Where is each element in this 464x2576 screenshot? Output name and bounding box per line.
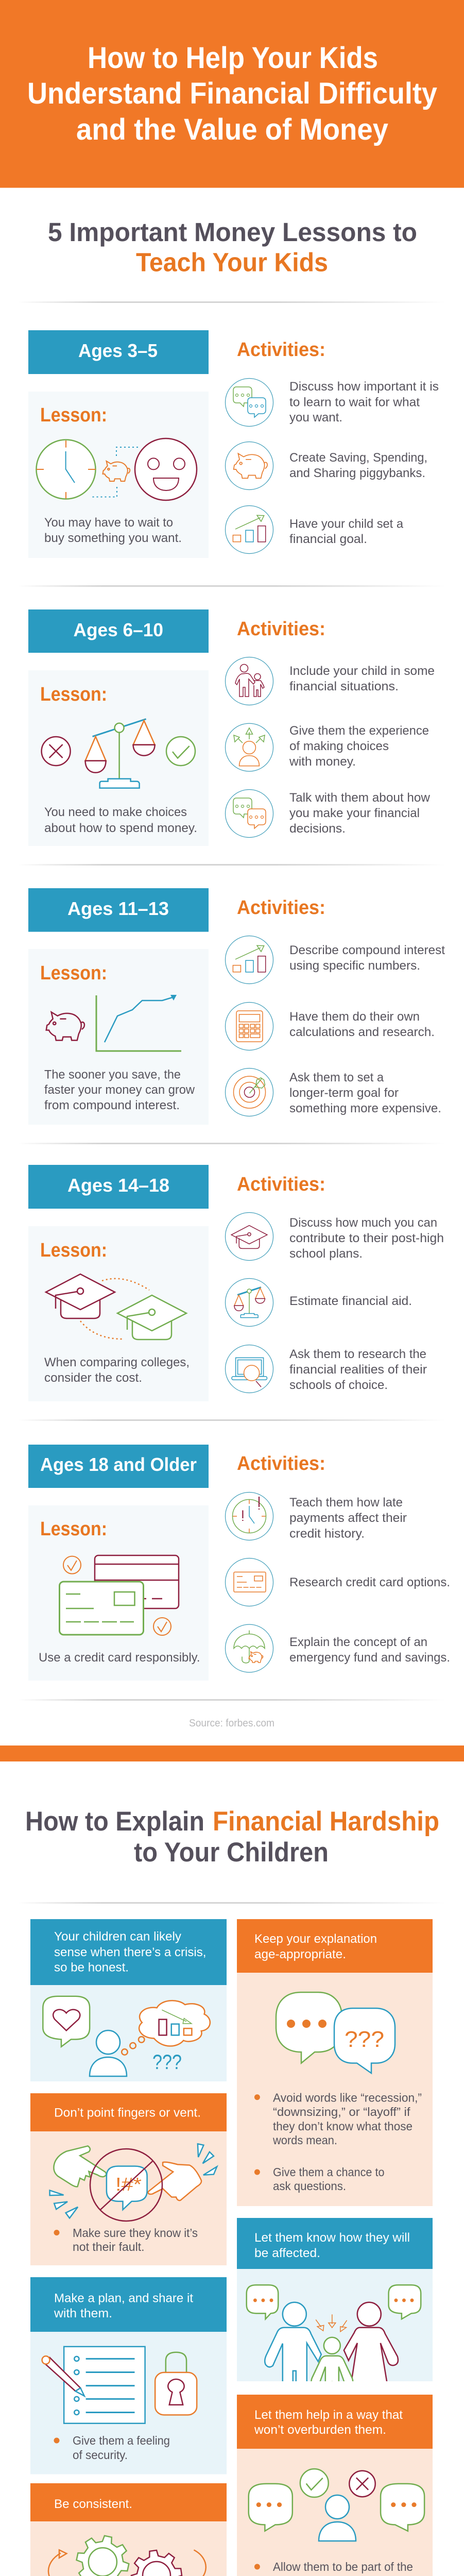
panel: be honest: Your children can likely: [54, 1930, 181, 1943]
bullet: Make sure they know it’s: [73, 2226, 198, 2240]
heading: 5 important money lessons: Teach Your Kids: [136, 247, 328, 277]
activity: piggybanks: [226, 442, 427, 489]
bullet: [54, 2226, 198, 2253]
activity: research schools: financial realities of their: [289, 1363, 427, 1377]
activity: include your child: Include your child in some: [289, 664, 435, 678]
main title: and the Value of Money: [76, 113, 388, 146]
section: ages 11-13: [28, 888, 445, 1125]
panel: let them help: won’t overburden them.: [254, 2423, 386, 2437]
icon: piggy bank and growth chart: [46, 995, 181, 1051]
source: forbes: Source: forbes.com: [189, 1718, 274, 1729]
icon: family with speech bubbles: [246, 2284, 421, 2381]
panel: age-appropriate: [237, 1919, 433, 2206]
lesson panel: Lesson:: [40, 962, 107, 984]
lesson panel: [28, 1226, 209, 1401]
activity: calculations: [226, 1003, 435, 1050]
icon: clock, piggy bank and smiley: [36, 438, 197, 500]
bullet: not their fault.: [73, 2240, 144, 2253]
lesson panel: Lesson:: [40, 1240, 107, 1261]
activity: talk about decisions: Talk with them about how: [289, 791, 431, 805]
activity: contribute to plans: [226, 1213, 444, 1261]
activity: credit card options: Research credit card options.: [289, 1575, 450, 1589]
activity: discuss waiting: to learn to wait for what: [289, 396, 420, 409]
activity: late payments: credit history.: [289, 1527, 365, 1540]
heading: financial hardship: to Your Children: [134, 1837, 329, 1868]
activity: calculations: calculations and research.: [289, 1025, 435, 1039]
lesson panel: [28, 670, 209, 846]
icon: gears and arrows: [48, 2531, 206, 2576]
panel: be consistent: Be consistent.: [54, 2497, 132, 2511]
lesson panel: [28, 392, 209, 558]
icon: graduation caps: [46, 1274, 186, 1340]
activities heading: Activities:: [237, 1453, 325, 1475]
header banner: [0, 0, 464, 188]
lesson panel: about how to spend money.: [44, 821, 197, 835]
activity: making choices: Give them the experience: [289, 724, 429, 738]
activity: research schools: schools of choice.: [289, 1378, 388, 1392]
activity: financial goal: [226, 506, 404, 553]
lesson panel: from compound interest.: [44, 1098, 180, 1112]
activities heading: Activities:: [237, 339, 325, 361]
icon: speech bubbles with question marks: [276, 1992, 395, 2073]
age banner: [28, 1445, 209, 1488]
panel: be honest: so be honest.: [54, 1961, 129, 1974]
panel: let them help: Let them help in a way that: [254, 2408, 403, 2422]
activity: talk about decisions: [226, 789, 431, 838]
activity: emergency fund: Explain the concept of an: [289, 1635, 427, 1649]
activity: late payments: Teach them how late: [289, 1496, 403, 1510]
panel: don't point fingers: [30, 2093, 227, 2265]
panel: let them help: [237, 2395, 433, 2576]
icon: checklist and padlock: [42, 2347, 197, 2424]
panel: make a plan: Make a plan, and share it: [54, 2292, 193, 2306]
heading: financial hardship: Financial Hardship: [213, 1806, 439, 1837]
panel: make a plan: with them.: [54, 2307, 112, 2320]
activity: contribute to plans: school plans.: [289, 1247, 363, 1261]
activity: late payments: [226, 1492, 407, 1540]
panel: be consistent: [30, 2483, 227, 2576]
orange separator bar: [0, 1745, 464, 1761]
bullet: of security.: [73, 2448, 128, 2462]
lesson panel: The sooner you save, the: [44, 1067, 181, 1082]
activity: making choices: [226, 723, 429, 771]
lesson panel: faster your money can grow: [44, 1083, 195, 1097]
lesson panel: Lesson:: [40, 1518, 107, 1540]
activity: emergency fund: emergency fund and savings.: [289, 1651, 450, 1665]
panel: be honest: sense when there’s a crisis,: [54, 1945, 206, 1959]
section: ages 6-10: [28, 609, 435, 846]
section: ages 14-18: [28, 1165, 444, 1401]
bullets: words mean.: [272, 2133, 337, 2147]
section: ages 18 and older: [28, 1445, 450, 1681]
activity: longer-term goal: Ask them to set a: [289, 1071, 384, 1084]
activities heading: Activities:: [237, 1174, 325, 1195]
activities heading: Activities:: [237, 897, 325, 919]
activity: talk about decisions: you make your financial: [289, 806, 420, 820]
icon: child sensing a crisis: ???: [152, 2051, 182, 2074]
bullets: they don’t know what those: [273, 2120, 413, 2133]
activity: emergency fund: [226, 1624, 450, 1672]
panel: be honest: [30, 1919, 227, 2081]
heading: financial hardship: [25, 1806, 439, 1868]
activity: contribute to plans: contribute to their post-high: [289, 1231, 444, 1245]
main title: [27, 41, 437, 146]
age banner: [28, 1165, 209, 1209]
activity: financial goal: financial goal.: [289, 532, 367, 546]
age banner: Ages 6–10: [73, 619, 163, 640]
activities heading: Activities:: [237, 618, 325, 640]
main title: Understand Financial Difficulty: [27, 77, 437, 110]
activity: discuss waiting: Discuss how important it is: [289, 380, 439, 394]
panel: don't point fingers: Don’t point fingers or vent.: [54, 2106, 201, 2120]
activity: calculations: Have them do their own: [289, 1010, 420, 1024]
age banner: Ages 14–18: [67, 1175, 169, 1196]
icon: balance scale with x and check: [42, 719, 195, 788]
main title: How to Help Your Kids: [88, 41, 378, 75]
icon: pointing hands with prohibition sign: !#*: [115, 2174, 142, 2195]
age banner: Ages 18 and Older: [40, 1454, 197, 1475]
section: ages 3-5: [28, 330, 439, 558]
panel: how they will be affected: [237, 2218, 433, 2381]
icon: speech bubbles with question marks: ???: [345, 2027, 384, 2052]
heading: financial hardship: How to Explain: [25, 1806, 204, 1837]
activity: discuss waiting: you want.: [289, 411, 342, 425]
panel: how they will be affected: be affected.: [254, 2246, 320, 2260]
lesson panel: Use a credit card responsibly.: [39, 1651, 200, 1665]
age banner: [28, 330, 209, 374]
bullet: Give them a feeling: [73, 2434, 170, 2447]
activity: research schools: [226, 1345, 427, 1393]
activity: financial goal: Have your child set a: [289, 517, 404, 531]
activity: discuss waiting: [226, 378, 439, 427]
bullets: Give them a chance to: [273, 2165, 384, 2179]
activity: research schools: Ask them to research the: [289, 1347, 426, 1361]
activity: longer-term goal: something more expensive.: [289, 1101, 441, 1115]
activity: making choices: of making choices: [289, 739, 389, 753]
activity: financial aid: Estimate financial aid.: [289, 1294, 412, 1308]
activity: compound interest: [226, 936, 445, 984]
icon: pointing hands with prohibition sign: [50, 2144, 217, 2221]
activity: include your child: financial situations.: [289, 680, 399, 693]
activity: contribute to plans: Discuss how much you can: [289, 1216, 437, 1230]
bullets: Allow them to be part of the: [273, 2560, 413, 2573]
lesson panel: Lesson:: [40, 684, 107, 705]
panel: how they will be affected: Let them know how they will: [254, 2231, 410, 2245]
lesson panel: [28, 949, 209, 1125]
panel: make a plan: [30, 2277, 227, 2474]
age banner: [28, 888, 209, 932]
activity: longer-term goal: longer-term goal for: [289, 1086, 399, 1100]
lesson panel: You need to make choices: [44, 805, 187, 819]
bullets: Avoid words like “recession,”: [273, 2091, 422, 2105]
icon: child sensing a crisis: [43, 1996, 210, 2076]
activity: making choices: with money.: [289, 755, 356, 769]
activity: compound interest: using specific numbers.: [289, 959, 420, 973]
bullet: [54, 2434, 170, 2462]
bullets: “downsizing,” or “layoff” if: [273, 2105, 410, 2119]
lesson panel: When comparing colleges,: [44, 1355, 190, 1369]
activity: piggybanks: Create Saving, Spending,: [289, 451, 427, 465]
lesson panel: You may have to wait to: [44, 516, 173, 530]
activity: include your child: [226, 657, 435, 705]
activity: compound interest: Describe compound interest: [289, 943, 445, 957]
lesson panel: [28, 1505, 209, 1681]
lesson panel: buy something you want.: [44, 531, 182, 545]
icon: decision making: [249, 2469, 424, 2541]
lesson panel: Lesson:: [40, 404, 107, 426]
activity: credit card options: [226, 1558, 450, 1606]
lesson panel: consider the cost.: [44, 1371, 142, 1385]
activity: late payments: payments affect their: [289, 1511, 407, 1525]
activity: piggybanks: and Sharing piggybanks.: [289, 466, 425, 480]
age banner: [28, 609, 209, 653]
age banner: Ages 11–13: [67, 898, 169, 919]
bullets: [254, 2091, 422, 2193]
panel: age-appropriate: Keep your explanation: [254, 1932, 377, 1946]
activity: financial aid: [226, 1279, 412, 1326]
panel: age-appropriate: age-appropriate.: [254, 1947, 346, 1961]
activity: talk about decisions: decisions.: [289, 822, 346, 836]
heading: 5 important money lessons: [48, 217, 417, 277]
bullets: ask questions.: [273, 2179, 346, 2193]
activity: longer-term goal: [226, 1069, 441, 1116]
heading: 5 important money lessons: 5 Important Money Lessons to: [48, 217, 417, 247]
age banner: Ages 3–5: [78, 340, 158, 361]
icon: credit cards: [60, 1555, 179, 1635]
